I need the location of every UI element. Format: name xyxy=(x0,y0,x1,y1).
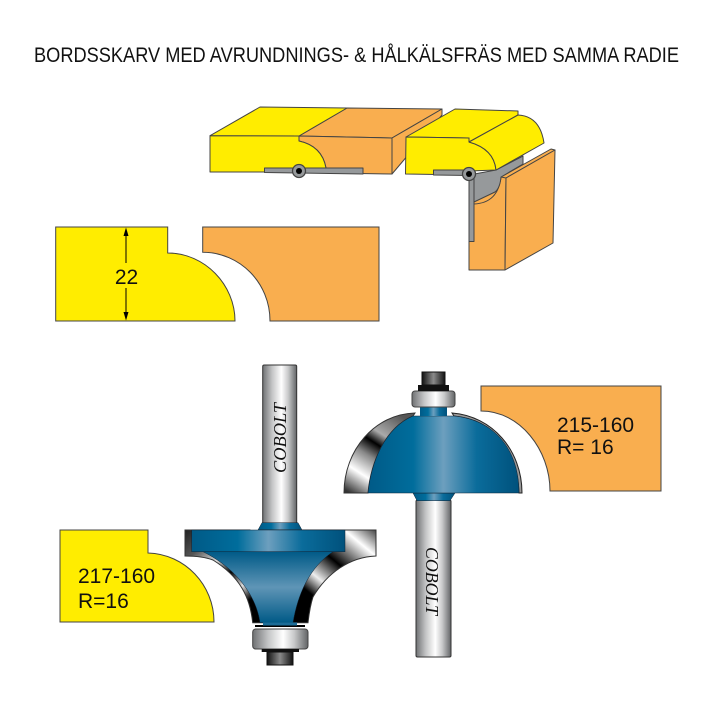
neck xyxy=(258,523,302,530)
profile: yellow rounding xyxy=(56,227,235,321)
profile label panel: 215-160: R= 16 xyxy=(557,436,614,459)
corner hinge pin xyxy=(462,168,476,180)
profile: orange cove xyxy=(203,227,379,321)
lower neck xyxy=(413,493,455,501)
blue body xyxy=(203,552,333,623)
orange vertical board front xyxy=(469,177,506,270)
brand label: COBOLT xyxy=(422,547,442,617)
washer xyxy=(255,625,305,627)
joint illustration: straight board joint xyxy=(210,107,442,178)
orange vertical board top xyxy=(501,149,555,178)
orange board top xyxy=(299,108,442,138)
router bit: cove 215-160 xyxy=(344,372,522,657)
profile label panel: 215-160 xyxy=(481,386,661,491)
grey cut face xyxy=(469,156,523,202)
label text: 215-160 xyxy=(557,414,634,437)
brand label: COBOLT xyxy=(270,401,290,473)
shank xyxy=(416,500,451,657)
bearing xyxy=(253,629,308,649)
upper neck xyxy=(420,407,447,416)
joint illustration: corner joint xyxy=(406,109,555,270)
steel dome right xyxy=(452,413,522,493)
profile label panel: 217-160 xyxy=(60,530,214,622)
orange vertical board side xyxy=(505,150,555,270)
steel edge left xyxy=(185,530,280,623)
steel dome left xyxy=(344,413,415,493)
corner hinge bars xyxy=(434,170,469,176)
orange board front xyxy=(299,136,392,174)
steel edge right xyxy=(260,530,376,623)
bolt xyxy=(418,385,449,391)
profile label panel: 217-160: R=16 xyxy=(78,590,129,613)
router bit: rounding-over 217-160 xyxy=(185,365,376,665)
bearing xyxy=(412,391,455,407)
orange board side xyxy=(392,109,442,174)
dimension arrow 22 xyxy=(115,228,138,320)
yellow board top xyxy=(210,107,347,136)
yellow rounded edge xyxy=(469,115,544,170)
yellow board front xyxy=(210,136,326,172)
cove arc on orange board xyxy=(474,177,501,204)
dimension value: 22 xyxy=(115,266,138,289)
label text: 217-160 xyxy=(78,565,155,588)
blue dome xyxy=(368,416,519,493)
blue flange xyxy=(192,530,345,552)
yellow board front xyxy=(406,137,496,175)
shank xyxy=(263,365,297,525)
hinge pin xyxy=(292,164,306,178)
yellow board top xyxy=(406,109,518,142)
bolt xyxy=(262,649,299,652)
hinge bar xyxy=(264,168,363,174)
